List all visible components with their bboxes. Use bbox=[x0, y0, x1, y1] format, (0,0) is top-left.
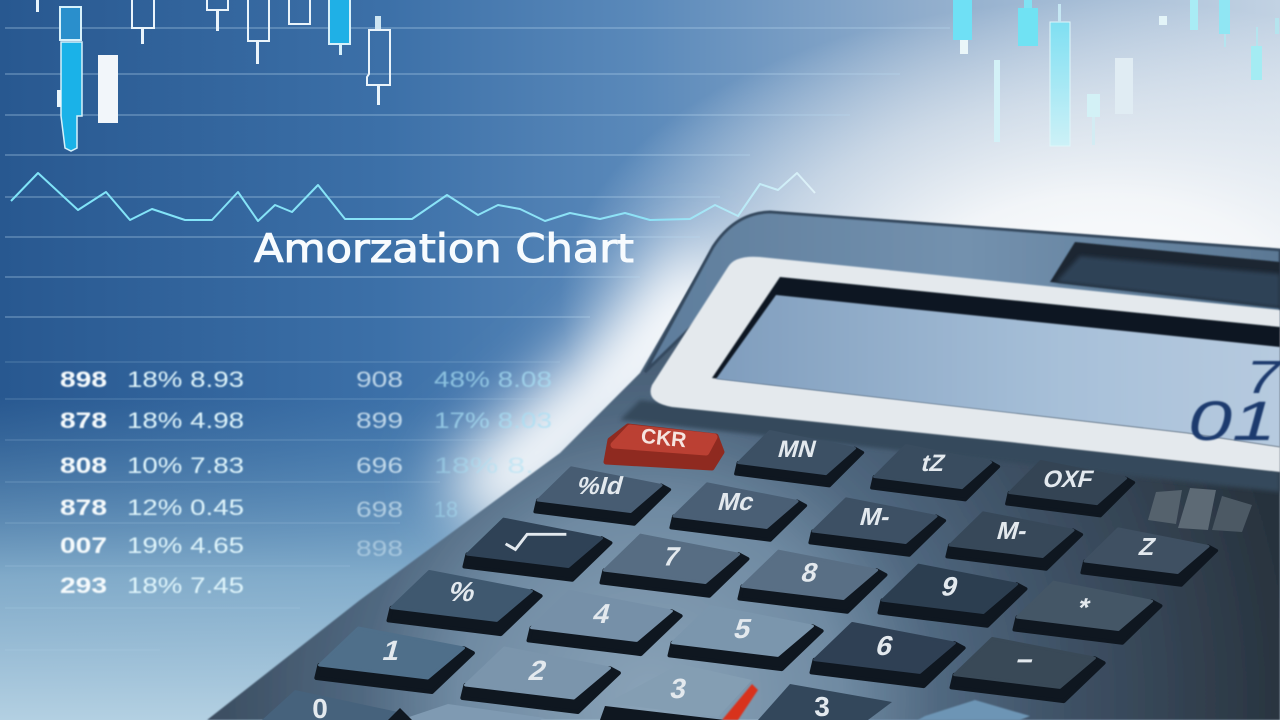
data table: left columns: 878 bbox=[60, 408, 107, 433]
key: Mc: Mc bbox=[715, 489, 757, 516]
data table: left columns: 878 bbox=[60, 495, 107, 520]
display digits: 01 bbox=[1188, 389, 1276, 452]
key: tZ: tZ bbox=[918, 450, 948, 477]
data table: right columns: 696 bbox=[356, 453, 403, 478]
data table: right columns: 18% 8. bbox=[434, 453, 534, 478]
data table: left columns: 18% 8.93 bbox=[127, 367, 244, 392]
display digits: 7 bbox=[1246, 351, 1280, 403]
key: red CKR bbox=[606, 425, 722, 468]
key: pale bottom bbox=[918, 700, 1030, 720]
key: minus: − bbox=[1012, 646, 1037, 677]
calculator body bbox=[207, 212, 1280, 720]
key: %Id: %Id bbox=[574, 473, 626, 500]
key: 3 with red glow bbox=[600, 664, 758, 720]
key: percent: % bbox=[445, 577, 479, 608]
key: 0 second bbox=[388, 704, 545, 720]
band below bezel bbox=[620, 400, 1280, 492]
key: OXF bbox=[1007, 461, 1133, 516]
title: Amorzation Chart bbox=[254, 227, 634, 272]
horizontal chart grid lines bbox=[5, 28, 950, 650]
key: 6: 6 bbox=[872, 631, 897, 662]
key: Z: Z bbox=[1136, 534, 1159, 561]
key: M-: M- bbox=[857, 504, 894, 531]
calculator upper housing bbox=[645, 212, 1280, 372]
key: 3 with red glow: 3 bbox=[668, 672, 689, 704]
key: %Id bbox=[535, 468, 669, 524]
key: minus bbox=[952, 638, 1104, 701]
key: 8: 8 bbox=[798, 557, 822, 587]
key: red CKR: CKR bbox=[640, 425, 688, 452]
data table: left columns: 898 bbox=[60, 367, 107, 392]
key: 1: 1 bbox=[379, 636, 404, 667]
data table: right columns: 48% 8.08 bbox=[434, 367, 552, 392]
key: 8 bbox=[739, 551, 885, 612]
data table: right columns: 898 bbox=[356, 536, 403, 561]
display digits bbox=[1188, 351, 1280, 452]
data table: right columns: 899 bbox=[356, 408, 403, 433]
key: 7 bbox=[601, 535, 747, 596]
data table: left columns: 19% 4.65 bbox=[127, 533, 244, 558]
key: 2: 2 bbox=[525, 656, 550, 687]
data table: right columns: 698 bbox=[356, 497, 403, 522]
key: 4 bbox=[529, 591, 681, 654]
key: 9: 9 bbox=[938, 571, 962, 601]
display screen bbox=[712, 277, 1280, 447]
key: percent bbox=[389, 571, 541, 634]
solar panel bbox=[1050, 242, 1280, 308]
key: Z bbox=[1082, 529, 1216, 585]
key: Mc bbox=[671, 484, 805, 540]
data table: left columns: 10% 7.83 bbox=[127, 453, 244, 478]
key: multiply: * bbox=[1074, 592, 1094, 622]
display bezel bbox=[651, 257, 1280, 472]
key: 5 bbox=[670, 606, 822, 669]
data table: right columns: 908 bbox=[356, 367, 403, 392]
key: tZ bbox=[872, 445, 998, 500]
key: M- second bbox=[947, 513, 1081, 569]
key: OXF: OXF bbox=[1040, 466, 1096, 493]
candlestick chart: top left bbox=[36, 0, 390, 151]
data table: left columns: 18% 4.98 bbox=[127, 408, 244, 433]
key: M- second: M- bbox=[994, 518, 1031, 545]
calculator bbox=[207, 212, 1280, 720]
data table: left columns: 808 bbox=[60, 453, 107, 478]
key: MN: MN bbox=[775, 436, 819, 463]
key: 0 bbox=[262, 690, 398, 720]
key: 5: 5 bbox=[730, 614, 755, 645]
key: multiply bbox=[1014, 582, 1160, 643]
key: 6 bbox=[812, 623, 964, 686]
data table: left columns: 007 bbox=[60, 533, 107, 558]
line chart bbox=[11, 173, 815, 221]
key: 7: 7 bbox=[660, 541, 684, 571]
data table: left columns bbox=[60, 367, 244, 598]
data table: left columns: 18% 7.45 bbox=[127, 573, 244, 598]
data table: right columns: 18 bbox=[434, 497, 458, 522]
key: 2 bbox=[462, 648, 619, 712]
data table: right columns bbox=[356, 367, 552, 561]
small keys bbox=[1148, 488, 1252, 532]
key: 9 bbox=[879, 565, 1025, 626]
key: MN bbox=[736, 431, 862, 486]
data table: right columns: 17% 8.03 bbox=[434, 408, 552, 433]
key: M- bbox=[810, 499, 944, 555]
data table: left columns: 293 bbox=[60, 573, 107, 598]
key: 4: 4 bbox=[589, 599, 614, 630]
key: 3 second bbox=[758, 684, 892, 720]
key: square root bbox=[464, 519, 610, 580]
key: 1 bbox=[316, 628, 473, 692]
data table: left columns: 12% 0.45 bbox=[127, 495, 244, 520]
candlestick chart: top right bbox=[953, 0, 1279, 146]
